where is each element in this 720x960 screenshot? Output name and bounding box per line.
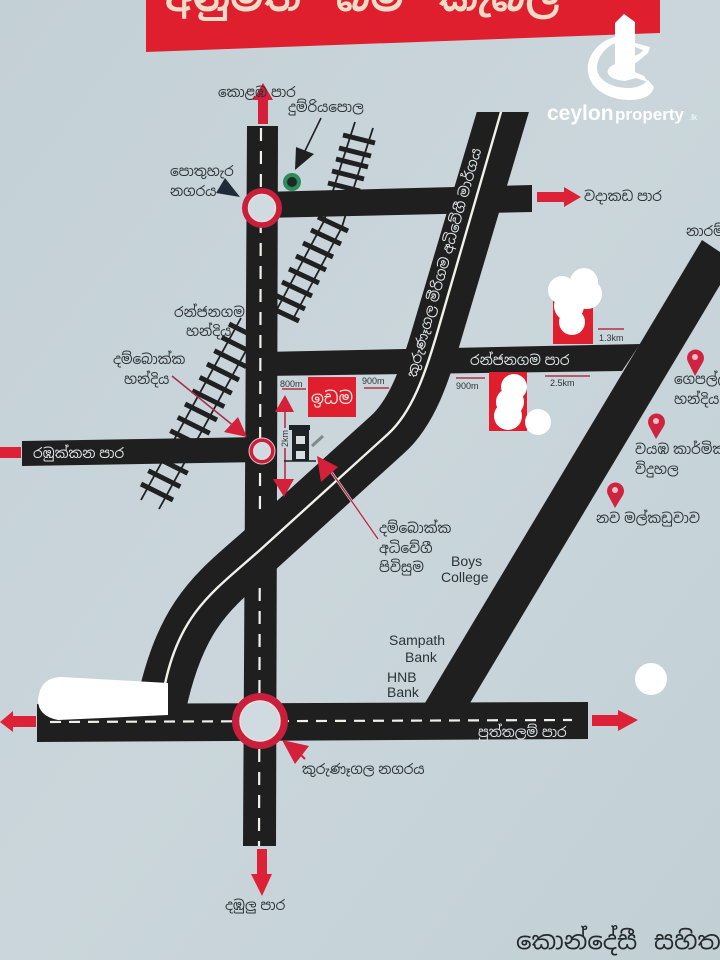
label: expressway entrance bbox=[379, 519, 452, 576]
distance: 900m right: 900m bbox=[456, 381, 479, 391]
logo: ceylonproperty: property bbox=[615, 105, 684, 124]
label: New Malkaduwawa: නව මල්කඩුවාව bbox=[596, 510, 700, 527]
label: Boys College: College bbox=[441, 569, 489, 585]
logo: ceylonproperty: .lk bbox=[689, 113, 698, 122]
label: Dambulla road: දඹුලු පාර bbox=[225, 898, 286, 914]
label: HNB Bank: Bank bbox=[387, 684, 420, 700]
railway track: lower bbox=[141, 318, 261, 509]
distance: 2.5km: 2.5km bbox=[550, 378, 575, 388]
footer text: කොන්දේසී සහිත bbox=[516, 924, 720, 955]
label: Pothuhera town bbox=[170, 164, 234, 199]
label: expressway entrance: අධිවේගී bbox=[379, 540, 433, 556]
land plot: upper with white mask bbox=[548, 268, 602, 344]
arrow: Colombo road bbox=[253, 83, 273, 124]
icon: toll booth bbox=[284, 425, 323, 461]
label: Ranjangama junction: රන්ජනගම bbox=[174, 303, 245, 320]
header banner bbox=[146, 0, 660, 52]
label: HNB Bank bbox=[387, 669, 420, 700]
road: right diagonal bbox=[425, 240, 720, 703]
arrow: to Pothuhera bbox=[216, 178, 240, 197]
label: expressway: කුරුණෑගල මීරිගම අධිවේගී මාර්ගය bbox=[403, 146, 484, 379]
label: Pothuhera town: පොතුහැර bbox=[170, 164, 234, 179]
arrow: west exit bbox=[0, 711, 36, 732]
logo: ceylonproperty bbox=[547, 14, 698, 125]
label: railway station: දුම්රියපොල bbox=[288, 99, 364, 116]
land plot: lower with white mask bbox=[489, 372, 551, 435]
road: Rambukkana bbox=[22, 437, 262, 466]
pin: Gepallawa junction bbox=[687, 349, 704, 376]
label: Ranjangama junction: හන්දිය bbox=[186, 322, 231, 340]
distance: 800m: 800m bbox=[280, 379, 303, 389]
arrow: to Dambokka junction bbox=[172, 376, 247, 437]
roundabout: Dambokka bbox=[249, 438, 275, 464]
label: Wayamba technical college bbox=[635, 440, 720, 478]
arrow: to Kurunegala town bbox=[282, 740, 309, 764]
label: Ranjangama junction bbox=[174, 303, 245, 340]
pin: New Malkaduwawa bbox=[607, 483, 624, 508]
land plot: red box: ඉඩම bbox=[311, 389, 353, 409]
road: Ranjangama horizontal bbox=[262, 344, 640, 376]
arrow: Rambukkana road bbox=[0, 447, 21, 458]
label: expressway entrance: දම්බොක්ක bbox=[379, 519, 452, 537]
label: Rambukkana road: රඹුක්කන පාර bbox=[33, 444, 124, 462]
distance: 900m bbox=[362, 376, 389, 388]
distance: 1.3km bbox=[598, 329, 624, 343]
distance: 2.5km bbox=[545, 376, 590, 388]
arrow: Puttalam road bbox=[592, 710, 638, 731]
label: Puttalam road: පුත්තලම් පාර bbox=[478, 723, 567, 741]
label: Pothuhera town: නගරය bbox=[170, 184, 216, 199]
railway track: upper bbox=[269, 122, 375, 321]
label: Sampath Bank: Sampath bbox=[389, 632, 445, 648]
label: Sampath Bank bbox=[389, 632, 445, 665]
label: Colombo road: කොළඹ පාර bbox=[218, 85, 296, 100]
pin: Wayamba technical college bbox=[648, 413, 665, 439]
white mask: right bbox=[635, 663, 667, 695]
road: main vertical bbox=[243, 126, 278, 846]
arrow: Dambulla road bbox=[251, 849, 272, 896]
arrow: to expressway entrance bbox=[317, 456, 378, 539]
label: Gepallawa junction bbox=[674, 371, 720, 408]
label: Dambokka junction: හන්දිය bbox=[124, 370, 169, 388]
roundabout: Pothuhera bbox=[242, 188, 282, 228]
label: Ranjangama road: රන්ජනගම පාර bbox=[470, 351, 570, 368]
arrow: Wadakada road bbox=[537, 187, 581, 207]
distance: 2km arrows bbox=[273, 395, 294, 497]
road: expressway bbox=[160, 98, 507, 712]
label: Boys College bbox=[441, 553, 489, 585]
label: Wayamba technical college: විදුහල bbox=[635, 461, 679, 478]
distance: 900m: 900m bbox=[362, 376, 385, 386]
white mask: road label bbox=[38, 677, 168, 720]
road: top horizontal to Wadakada bbox=[262, 185, 532, 218]
label: Gepallawa junction: හන්දිය bbox=[674, 390, 719, 408]
logo: ceylonproperty: ceylon bbox=[547, 102, 614, 125]
distance: 2km arrows: 2km bbox=[280, 430, 290, 447]
roundabout: Kurunegala bbox=[232, 693, 288, 749]
label: Kurunegala town: කුරුණෑගල නගරය bbox=[302, 762, 425, 777]
land plot: red box bbox=[308, 377, 356, 417]
label: expressway entrance: පිවිසුම bbox=[379, 559, 424, 576]
label: Wadakada road: වදාකඩ පාර bbox=[584, 189, 662, 205]
label: Dambokka junction: දම්බොක්ක bbox=[113, 350, 186, 368]
arrow: to railway station bbox=[295, 118, 321, 170]
distance: 1.3km: 1.3km bbox=[599, 333, 624, 343]
label: Boys College: Boys bbox=[451, 553, 482, 569]
label: Sampath Bank: Bank bbox=[405, 649, 438, 665]
icon: railway station bbox=[283, 173, 301, 191]
distance: 900m right bbox=[456, 378, 485, 391]
label: HNB Bank: HNB bbox=[387, 669, 417, 685]
label: Dambokka junction bbox=[113, 350, 186, 388]
road: Puttalam horizontal bbox=[37, 702, 588, 742]
